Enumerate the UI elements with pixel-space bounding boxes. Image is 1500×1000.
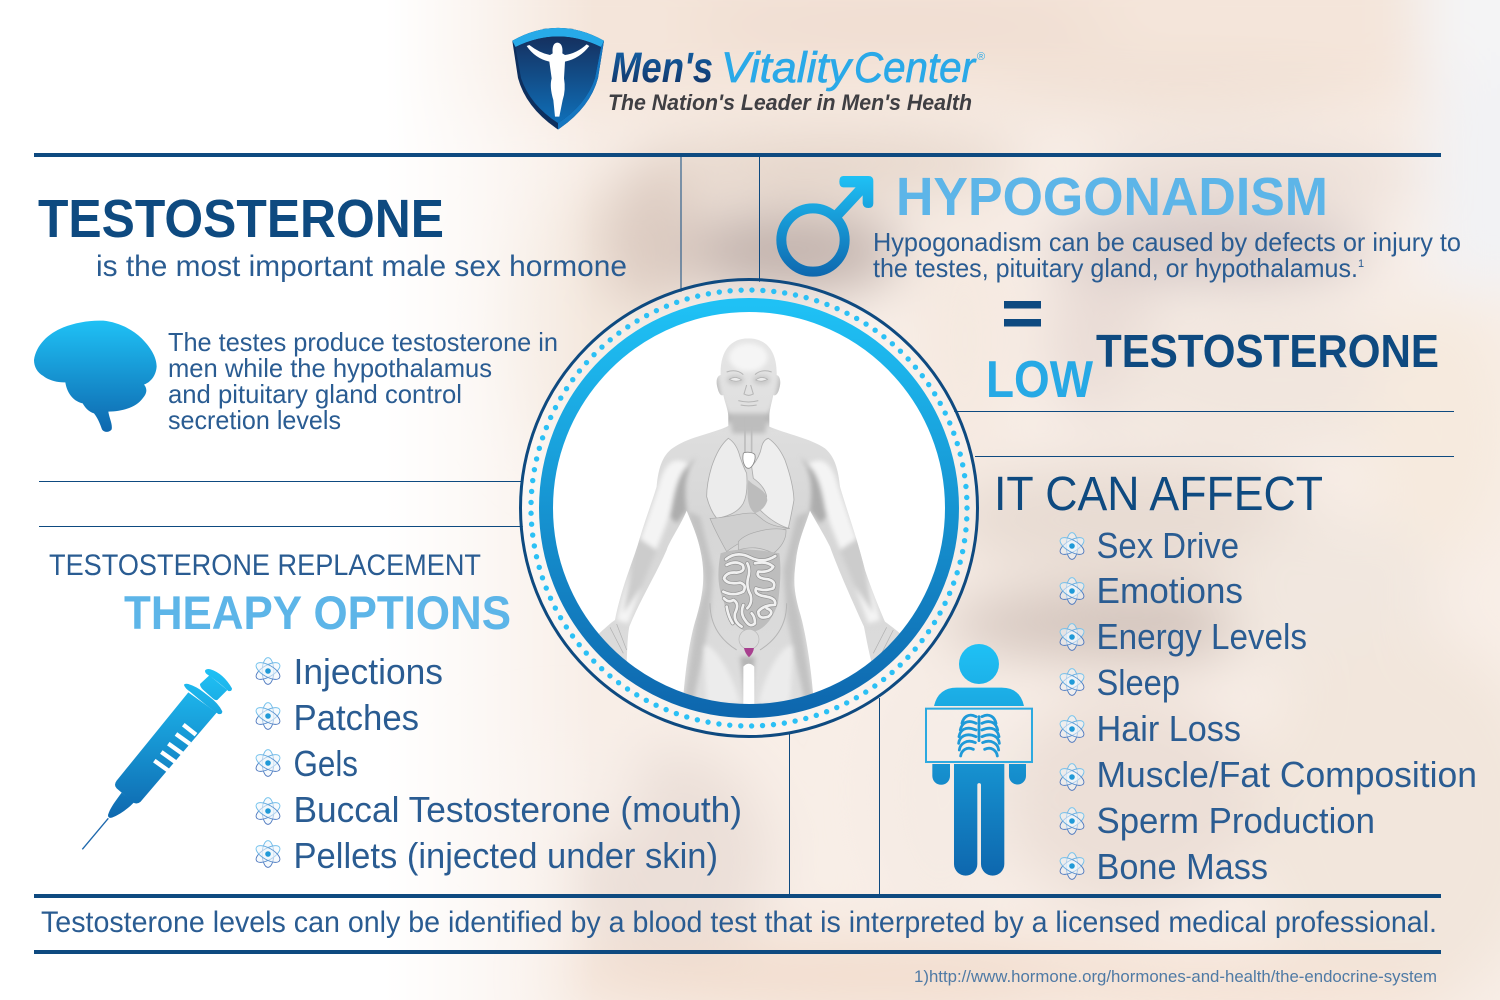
logo wordmark: Center <box>854 44 977 92</box>
icon: brain <box>34 321 157 432</box>
item: energy levels: Energy Levels <box>1096 616 1307 657</box>
item: sex drive: Sex Drive <box>1096 525 1239 566</box>
heading: testosterone replacement: TESTOSTERONE REPLACEMENT <box>49 549 481 582</box>
text: testes description: The testes produce testosterone in <box>168 327 558 357</box>
text: testes description: and pituitary gland control <box>168 379 462 409</box>
text: hypogonadism description <box>873 227 1461 283</box>
item: muscle fat composition: Muscle/Fat Composition <box>1096 754 1477 795</box>
label: testosterone: TESTOSTERONE <box>1096 325 1439 377</box>
item: sperm production: Sperm Production <box>1096 800 1375 841</box>
logo wordmark: ® <box>977 51 985 63</box>
logo shield <box>512 28 604 130</box>
medallion white disc <box>552 311 946 705</box>
text: testes description: secretion levels <box>168 405 341 435</box>
item: sleep: Sleep <box>1096 662 1180 703</box>
panel: it can affect <box>926 468 1477 887</box>
heading: it can affect: IT CAN AFFECT <box>994 468 1323 521</box>
logo <box>512 28 985 130</box>
item: bone mass: Bone Mass <box>1096 846 1268 887</box>
icon: person with chest x-ray <box>926 644 1032 876</box>
anatomy figure <box>590 333 910 710</box>
icon: male symbol <box>781 176 873 272</box>
item: pellets: Pellets (injected under skin) <box>294 835 718 876</box>
label: low: LOW <box>986 351 1094 409</box>
central anatomy medallion <box>520 280 978 736</box>
panel: testosterone intro <box>34 189 627 435</box>
item: gels <box>254 743 358 784</box>
logo wordmark: The Nation's Leader in Men's Health <box>608 90 972 115</box>
footer statement: Testosterone levels can only be identified by a blood test that is interpreted by a licensed medical professional. <box>41 906 1437 939</box>
text: testes description: men while the hypothalamus <box>168 353 492 383</box>
panel: hypogonadism <box>781 167 1461 409</box>
logo wordmark: Vitality <box>721 44 854 92</box>
text: hypogonadism description: Hypogonadism can be caused by defects or injury to <box>873 227 1461 257</box>
medallion gradient ring <box>546 305 952 711</box>
item: patches: Patches <box>294 697 419 738</box>
logo wordmark: Men's <box>611 44 713 92</box>
text: hypogonadism description: the testes, pituitary gland, or hypothalamus. <box>873 253 1358 283</box>
text: testes description <box>168 327 558 435</box>
footnote: 1)http://www.hormone.org/hormones-and-health/the-endocrine-system <box>914 967 1437 986</box>
medallion dotted ring <box>531 290 967 726</box>
item: emotions: Emotions <box>1096 570 1243 611</box>
heading: hypogonadism: HYPOGONADISM <box>896 167 1328 227</box>
item: buccal testosterone: Buccal Testosterone (mouth) <box>294 789 742 830</box>
subheading: is the most important male sex hormone <box>96 250 627 283</box>
equals sign <box>1004 301 1041 326</box>
medallion outer ring <box>520 280 978 736</box>
logo wordmark <box>608 44 985 115</box>
list: affected areas <box>1058 525 1477 887</box>
item: sleep <box>1058 662 1180 703</box>
item: gels: Gels <box>294 743 358 784</box>
text: hypogonadism description: 1 <box>1358 258 1364 270</box>
heading: testosterone: TESTOSTERONE <box>38 189 444 249</box>
item: injections: Injections <box>294 651 443 692</box>
list: therapy options <box>254 651 742 876</box>
item: hair loss: Hair Loss <box>1096 708 1241 749</box>
icon: syringe <box>82 669 232 849</box>
heading: theapy options: THEAPY OPTIONS <box>124 586 511 639</box>
panel: therapy options <box>49 549 742 876</box>
